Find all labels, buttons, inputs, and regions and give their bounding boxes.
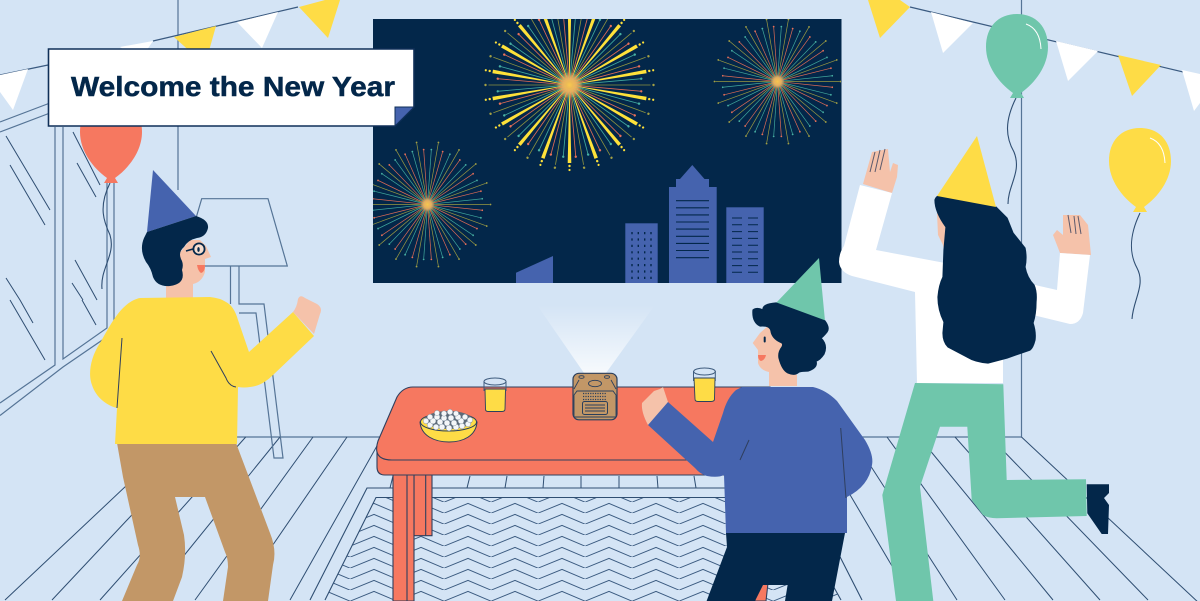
juice glass on left: [484, 378, 506, 412]
rug with zigzag pattern: [310, 488, 865, 601]
sweater: [90, 297, 314, 444]
right hand with finger lines: [1053, 215, 1091, 255]
floor boards: [5, 437, 1200, 601]
table: [377, 387, 770, 601]
fireworks burst: large centre: [484, 19, 655, 172]
table legs: [393, 475, 768, 601]
left hand with finger lines: [863, 149, 898, 193]
table side edge: [377, 448, 770, 475]
person: man in yellow sweater: [90, 170, 321, 601]
hair: [142, 216, 208, 286]
city skyline buildings: [516, 165, 764, 283]
green trousers: [882, 383, 1087, 601]
hand: [293, 296, 321, 334]
glasses: [186, 243, 205, 255]
floor lamp: [182, 199, 287, 458]
party hat: green: [776, 258, 825, 321]
title banner: [48, 49, 414, 126]
room outline: walls and window: [0, 0, 1022, 437]
title text: Welcome the New Year: [71, 71, 395, 102]
hand: [642, 387, 668, 425]
face and neck: [753, 325, 797, 386]
sweater fold lines: [740, 428, 846, 498]
eye: [764, 338, 766, 342]
popcorn bowl: [420, 409, 477, 442]
juice glass on right: [694, 368, 715, 402]
ear and cheek: [937, 213, 946, 260]
pants: [117, 443, 274, 601]
neck and face: [166, 240, 211, 298]
sweater fold lines: [117, 338, 236, 408]
balloon: green: [986, 14, 1048, 204]
long hair: [935, 196, 1036, 363]
white top with raised arms: [839, 185, 1090, 383]
hair: [753, 303, 828, 374]
projector device: [573, 373, 617, 420]
person: woman in white top: [839, 136, 1109, 601]
fireworks burst: left: [373, 142, 492, 268]
balloon: yellow: [1109, 128, 1171, 319]
mouth: [758, 355, 766, 361]
person: man in blue sweater: [642, 258, 872, 601]
bunting string with flags: [0, 0, 1200, 111]
party hat: yellow: [937, 136, 996, 207]
folded corner: [395, 107, 414, 126]
projected screen: [363, 0, 842, 283]
table top: [377, 387, 770, 460]
balloon: coral: [80, 99, 142, 289]
sweater: [648, 387, 872, 533]
fireworks burst: top right: [713, 16, 842, 147]
shoe: [1087, 484, 1109, 534]
popcorn kernels: [423, 409, 473, 431]
pants: [707, 533, 845, 601]
mouth: [197, 265, 205, 273]
projector light cone: [537, 305, 655, 373]
party hat: blue: [147, 170, 196, 232]
